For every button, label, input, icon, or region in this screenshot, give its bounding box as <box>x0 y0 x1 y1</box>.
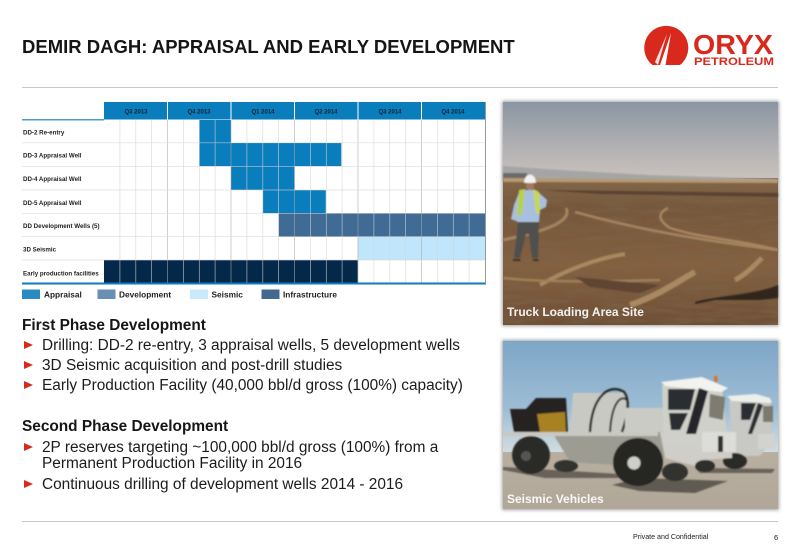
wheels <box>512 436 715 486</box>
heading: first phase: First Phase Development <box>22 317 206 334</box>
bullet: continuous drilling: Continuous drilling of development wells 2014 - 2016 <box>42 476 403 493</box>
main vehicle <box>503 376 736 466</box>
quarter header: Q3 2014 <box>378 110 402 116</box>
legend: Seismic <box>212 290 243 300</box>
photo: seismic vehicles <box>500 338 782 512</box>
legend: Appraisal <box>44 290 82 300</box>
row labels: DD-3 Appraisal Well <box>23 152 82 160</box>
rear vehicle <box>723 394 775 469</box>
quarter header <box>104 102 485 120</box>
footer note: Private and Confidential <box>633 533 708 541</box>
legend <box>22 290 337 300</box>
caption: Seismic Vehicles <box>507 492 604 506</box>
bullet: 2P reserves <box>24 439 438 472</box>
caption: Truck Loading Area Site <box>507 305 644 319</box>
bullet: 2P reserves: 2P reserves targeting ~100,000 bbl/d gross (100%) from a <box>42 439 438 456</box>
quarter header: Q3 2013 <box>124 110 148 116</box>
text block: second phase <box>22 418 438 493</box>
logo: Oryx Petroleum <box>644 26 774 68</box>
row labels: DD-5 Appraisal Well <box>23 200 82 207</box>
legend: Development <box>119 290 171 300</box>
cab <box>662 385 727 446</box>
gantt chart <box>22 102 486 300</box>
logo: Oryx Petroleum: ORYX <box>693 29 774 60</box>
photo: truck loading area site <box>500 98 782 328</box>
row labels <box>23 130 100 278</box>
row labels: DD Development Wells (5) <box>23 223 100 230</box>
quarter header: Q1 2014 <box>251 110 275 116</box>
logo: Oryx Petroleum: PETROLEUM <box>694 56 774 68</box>
bullet: drilling: Drilling: DD-2 re-entry, 3 appraisal wells, 5 development wells <box>42 337 460 354</box>
row labels: DD-2 Re-entry <box>23 130 65 136</box>
row labels: DD-4 Appraisal Well <box>23 176 82 183</box>
worker <box>511 175 547 261</box>
legend: Infrastructure <box>283 290 337 300</box>
title: DEMIR DAGH: APPRAISAL AND EARLY DEVELOPMENT <box>22 36 515 57</box>
quarter header: Q4 2013 <box>187 110 211 116</box>
bullet: 2P reserves: Permanent Production Facility in 2016 <box>42 455 302 472</box>
row labels: Early production facilities <box>23 270 99 278</box>
bullet: 3D seismic: 3D Seismic acquisition and post-drill studies <box>42 357 342 374</box>
heading: second phase: Second Phase Development <box>22 418 228 435</box>
text block: first phase <box>22 317 463 394</box>
page number: 6 <box>774 533 778 542</box>
quarter header: Q4 2014 <box>441 110 465 116</box>
row labels: 3D Seismic <box>23 246 57 254</box>
bullet: early production facility: Early Production Facility (40,000 bbl/d gross (100%) capacity) <box>42 377 463 394</box>
schedule bars <box>104 120 485 283</box>
grid <box>22 120 485 283</box>
quarter header: Q2 2014 <box>314 110 338 116</box>
